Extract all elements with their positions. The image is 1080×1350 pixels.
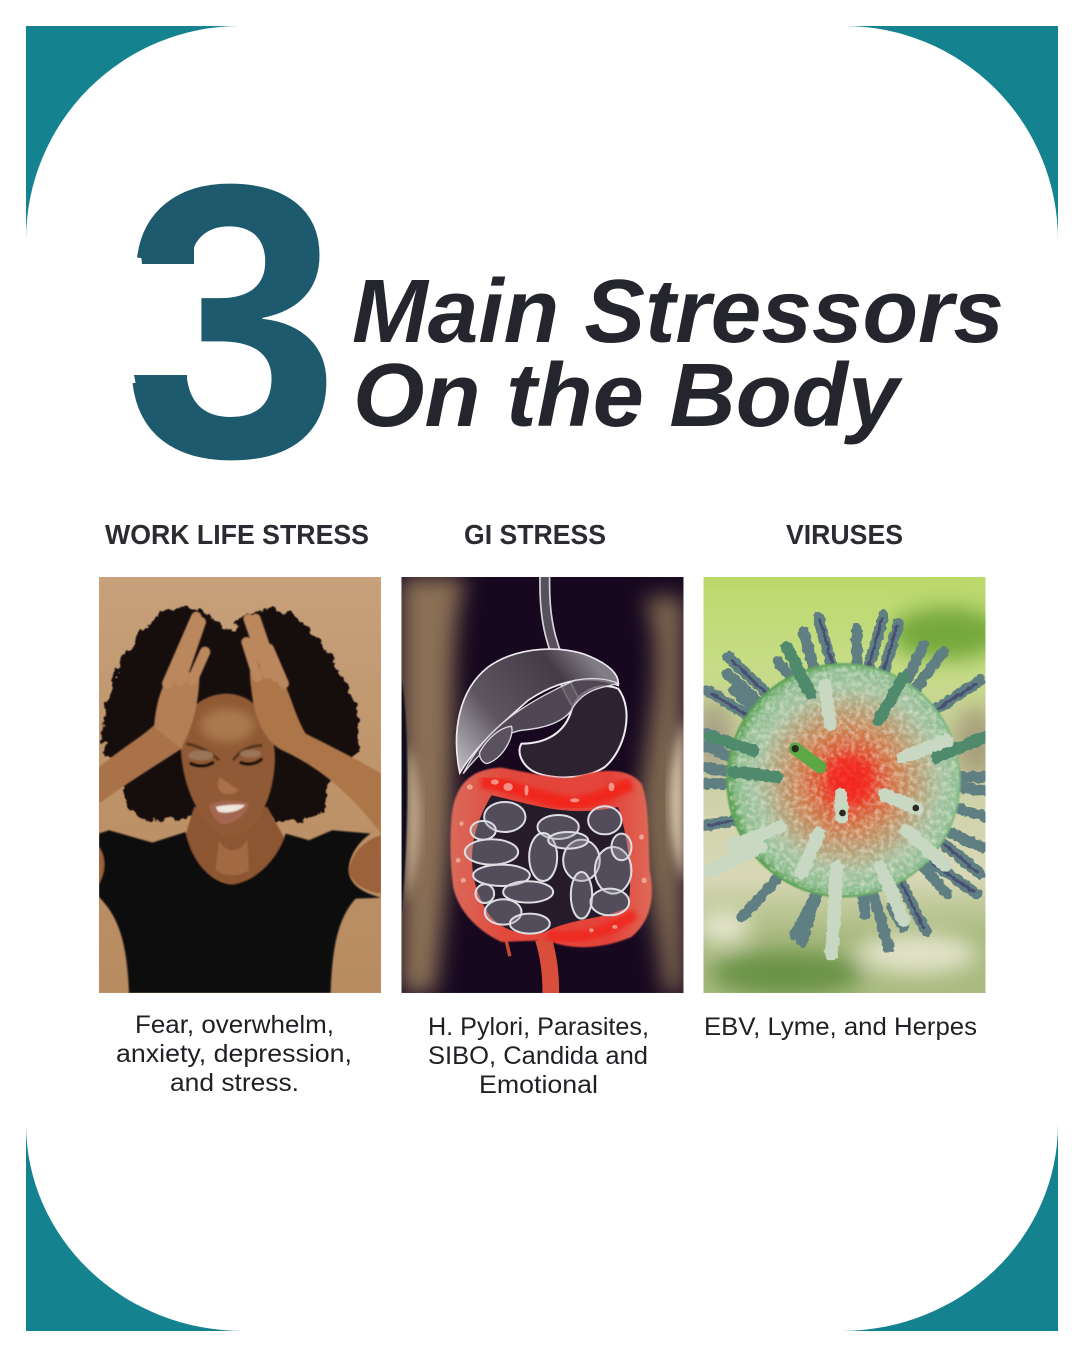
description: work life stress — [116, 1011, 352, 1097]
colon — [450, 768, 652, 947]
back spikes — [705, 615, 985, 947]
face — [181, 694, 275, 838]
eye left — [190, 762, 214, 766]
sphere surface texture — [728, 665, 958, 895]
line: Emotional — [479, 1071, 598, 1099]
red centre — [827, 755, 873, 805]
left fingers — [167, 617, 205, 684]
pancreas band — [463, 679, 618, 774]
side highlight — [669, 717, 683, 884]
big numeral 3: 3 — [124, 103, 340, 539]
left glow — [406, 744, 420, 904]
forehead highlight — [201, 709, 254, 742]
neck and chest — [184, 807, 286, 884]
spike dark streaks — [708, 619, 977, 927]
brow right — [233, 745, 262, 760]
line: Fear, overwhelm, — [135, 1011, 334, 1039]
mouth — [209, 800, 249, 824]
liver — [457, 649, 618, 773]
stomach — [520, 686, 627, 777]
background blur patches — [694, 607, 1003, 997]
photo: digestive system — [402, 577, 683, 993]
corner: top left — [26, 26, 240, 240]
corner: bottom left — [26, 1124, 243, 1331]
description: viruses: EBV, Lyme, and Herpes — [704, 1013, 977, 1041]
eyelid shade — [188, 750, 213, 760]
left forearm — [99, 725, 184, 804]
colon bright band — [481, 782, 631, 804]
line: and stress. — [170, 1069, 299, 1097]
torso glow — [402, 577, 683, 993]
hair — [103, 606, 360, 822]
virus sphere — [726, 663, 961, 898]
column heading: viruses: VIRUSES — [786, 519, 903, 550]
colon highlights — [456, 779, 647, 932]
corner: top right — [844, 26, 1058, 240]
column heading: GI stress: GI STRESS — [464, 519, 606, 550]
rectum — [543, 939, 551, 993]
brow left — [186, 744, 219, 760]
mid spikes — [710, 647, 985, 777]
left edge shadow — [402, 680, 407, 914]
colon lower band — [548, 914, 635, 937]
photo: stressed woman — [99, 577, 381, 993]
esophagus — [545, 577, 576, 704]
left upper arm — [99, 847, 104, 884]
description: GI stress — [428, 1013, 649, 1099]
eye right — [240, 759, 262, 764]
corner: bottom right — [841, 1124, 1058, 1331]
left palm — [154, 670, 200, 749]
title — [352, 262, 1004, 446]
right arm and palm — [250, 667, 381, 834]
spike tips — [791, 745, 919, 816]
eyelid shade right — [240, 750, 261, 758]
title line 1: Main Stressors — [352, 262, 1004, 362]
line: SIBO, Candida and — [428, 1042, 648, 1070]
teeth — [216, 805, 245, 813]
title line 2: On the Body — [353, 346, 903, 446]
line: H. Pylori, Parasites, — [428, 1013, 649, 1041]
right fingers — [246, 619, 284, 684]
green tipped spike — [795, 749, 820, 767]
pale front spikes — [710, 685, 947, 954]
right upper arm — [349, 835, 381, 894]
line: anxiety, depression, — [116, 1040, 352, 1068]
column heading: work life stress: WORK LIFE STRESS — [105, 519, 369, 550]
photo: virus — [694, 577, 1003, 997]
appendix — [504, 940, 512, 957]
nose light — [218, 777, 239, 794]
small intestine — [465, 795, 631, 934]
gallbladder — [480, 726, 512, 764]
chest light — [216, 840, 249, 875]
shirt — [99, 830, 381, 993]
